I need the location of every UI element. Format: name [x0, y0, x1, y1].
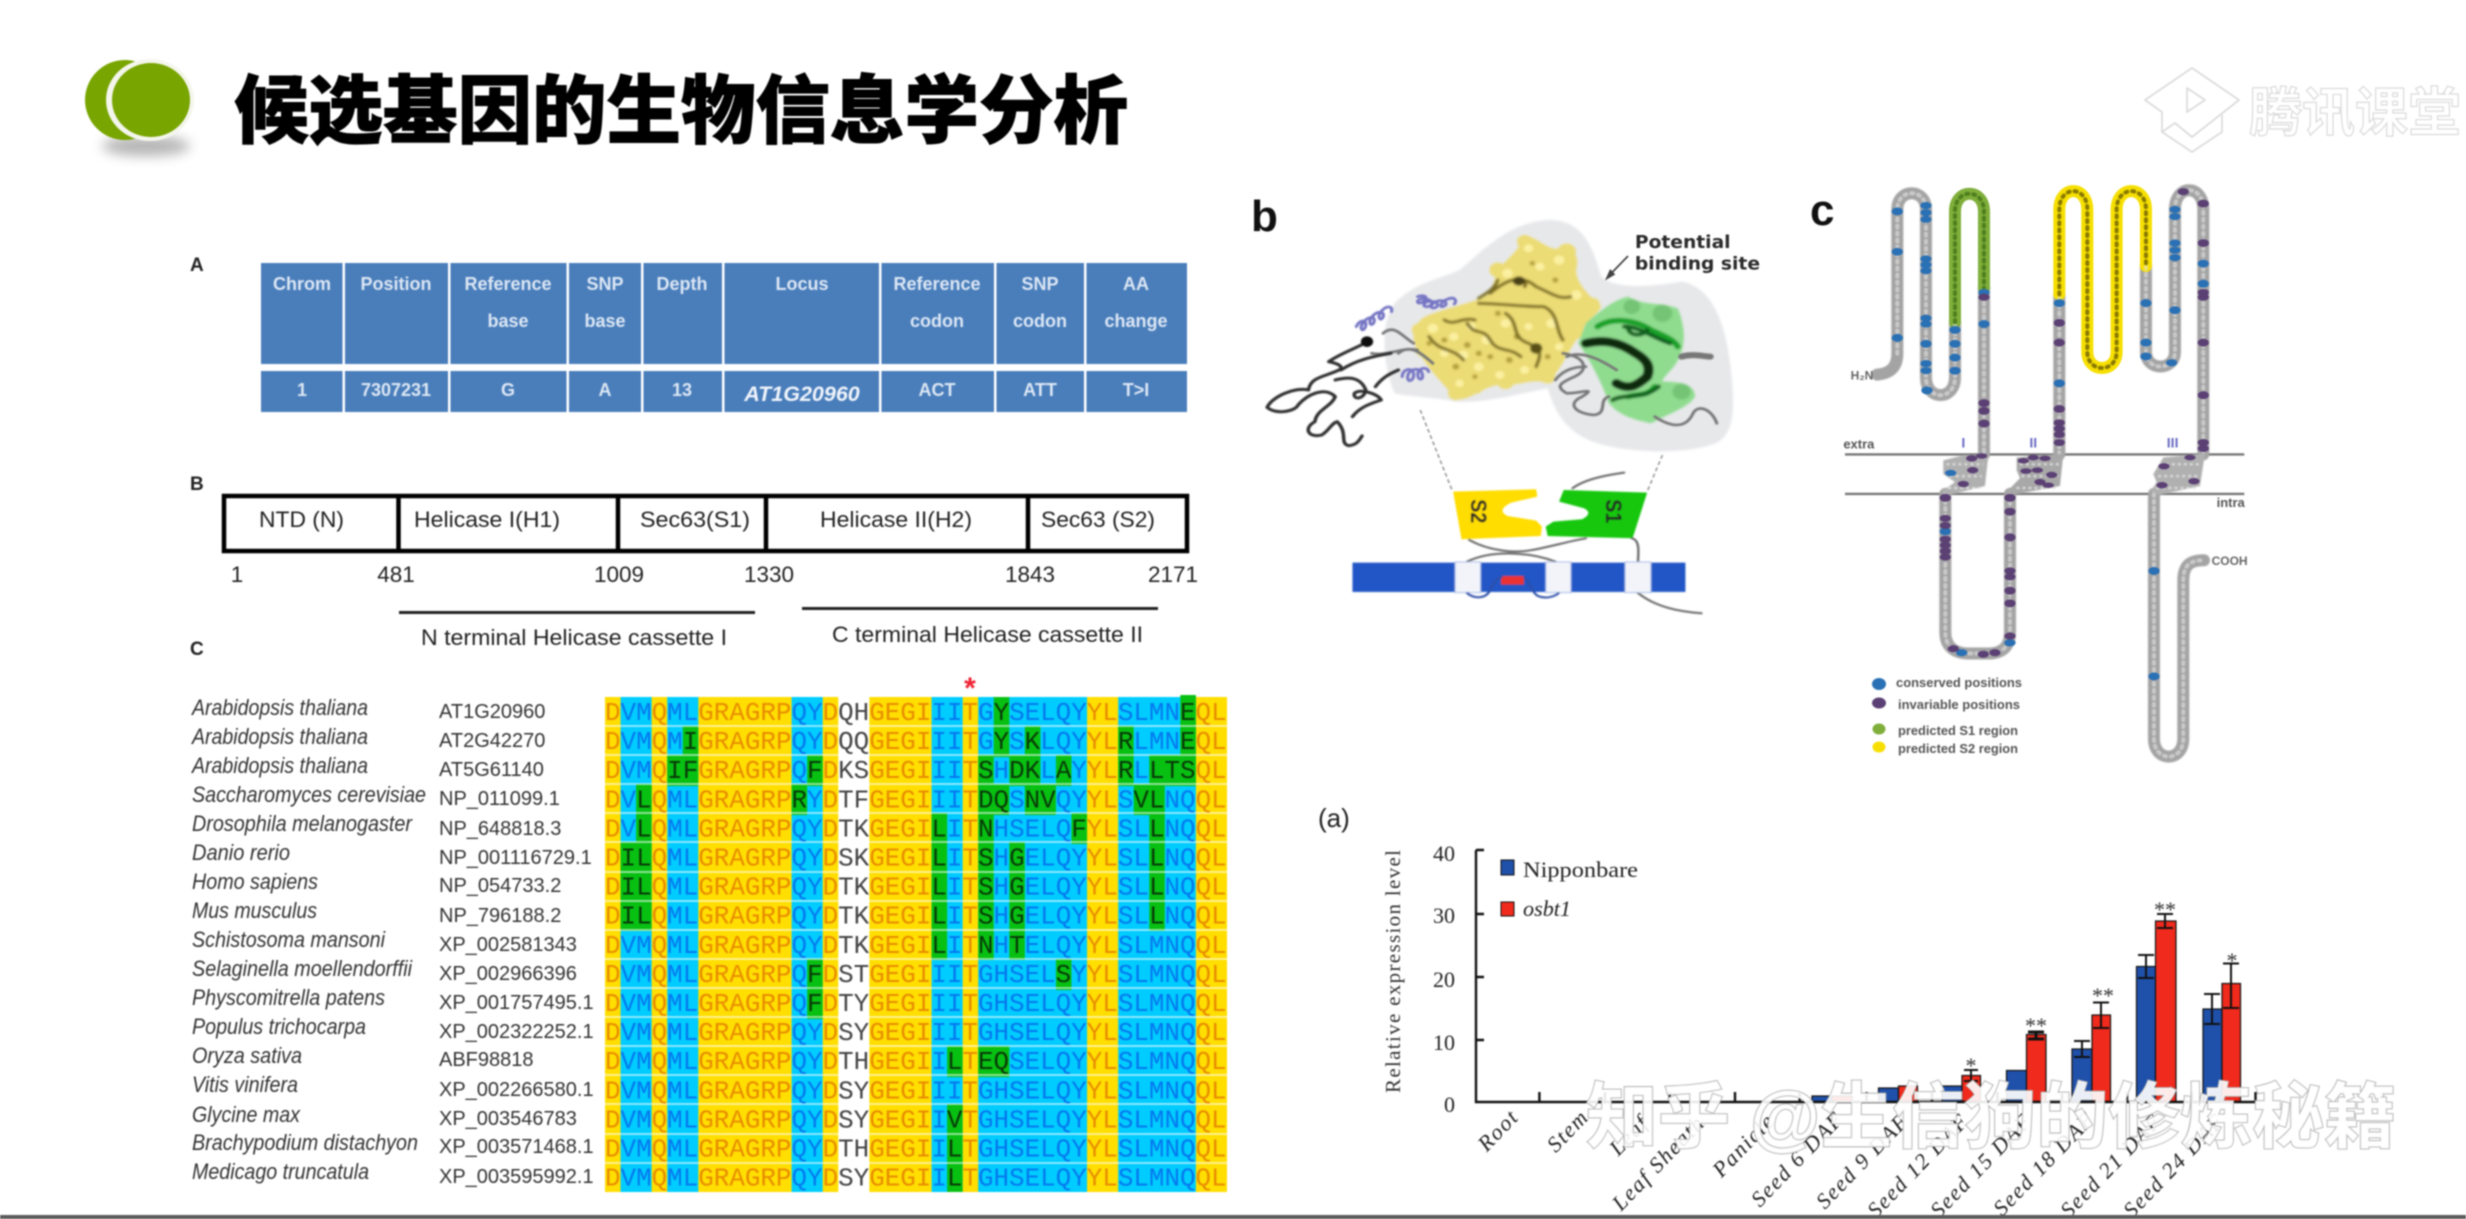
panel B: protein domain bar: Sec63(S1): [640, 507, 750, 532]
topology labels: [1843, 368, 2248, 568]
puzzle piece S1: [1546, 490, 1647, 538]
y-axis title: Relative expression level: [1381, 850, 1405, 1093]
topology labels: intra: [2217, 495, 2246, 510]
panel label B: B: [190, 474, 204, 495]
accession numbers: XP_003571468.1: [439, 1136, 594, 1158]
panel B: protein domain bar: 1843: [1005, 562, 1055, 587]
species names: Saccharomyces cerevisiae: [192, 782, 426, 807]
x-axis category labels: Root: [1472, 1104, 1524, 1157]
table header labels: AA: [1123, 274, 1149, 294]
table header labels: base: [584, 311, 626, 331]
accession numbers: XP_001757495.1: [439, 992, 594, 1014]
panel B: protein domain bar: 1330: [744, 562, 794, 587]
alignment letters: DVMQMIGRAGRPQYDQQGEGIIITGYSKLQYYLRLMNEQL: [605, 727, 1227, 757]
panel c: membrane topology diagram: [1843, 188, 2248, 757]
y-axis tick labels: 20: [1433, 967, 1455, 992]
invariable residue beads (purple): [1940, 188, 2209, 658]
table header labels: Chrom: [273, 274, 331, 294]
row separators: [605, 725, 1227, 1164]
error bars: [1964, 914, 2239, 1081]
x-axis category labels: Panicle: [1706, 1108, 1780, 1183]
species names: Drosophila melanogaster: [192, 811, 414, 836]
S1 region in green: [1955, 194, 1984, 322]
alignment letters: DVMQMLGRAGRPQYDSYGEGIIITGHSELQYYLSLMNQQL: [605, 1018, 1227, 1048]
panel B: protein domain bar: 1009: [594, 562, 644, 587]
chart legend: Nipponbare: [1523, 857, 1638, 882]
binding site label: Potential: [1635, 233, 1731, 253]
table data values: 1: [297, 380, 307, 400]
table data row: [261, 371, 1187, 412]
topology labels: extra: [1843, 436, 1875, 451]
species names: Selaginella moellendorffii: [192, 956, 413, 981]
species names: Vitis vinifera: [192, 1072, 298, 1097]
table data values: 13: [672, 380, 692, 400]
topology labels: III: [2167, 434, 2178, 450]
accession numbers: AT5G61140: [439, 759, 544, 781]
table header labels: change: [1104, 311, 1168, 331]
accession numbers: XP_002966396: [439, 963, 577, 985]
alignment letters: DVMQMLGRAGRPQFDTYGEGIIITGHSELQYYLSLMNQQL: [605, 989, 1227, 1019]
table data values: AT1G20960: [743, 382, 860, 406]
table data values: ACT: [918, 380, 956, 400]
panel label c: c: [1810, 186, 1834, 235]
y-axis tick labels: [1433, 841, 1455, 1117]
bottom rule: [0, 1215, 2466, 1219]
species names: [190, 695, 426, 1184]
significance stars: *: [2226, 948, 2238, 973]
puzzle piece S2: [1453, 489, 1542, 539]
alignment letters: DILQMLGRAGRPQYDTKGEGILITSHGELQYYLSLLNQQL: [605, 902, 1227, 932]
table data values: [297, 380, 1149, 406]
table header labels: codon: [910, 311, 964, 331]
bars osbt1: [1832, 921, 2240, 1102]
binding site label: binding site: [1635, 254, 1760, 274]
panel B: protein domain bar: 2171: [1148, 562, 1198, 587]
accession numbers: AT1G20960: [439, 701, 545, 723]
accession numbers: XP_003546783: [439, 1108, 577, 1130]
alignment letters: DILQMLGRAGRPQYDSKGEGILITSHGELQYYLSLLNQQL: [605, 844, 1227, 874]
chart legend: [1501, 857, 1638, 921]
panel c legend: predicted S1 region: [1898, 723, 2018, 738]
x-axis category labels: [1472, 1104, 2230, 1219]
conserved residue beads (blue): [1892, 202, 2209, 680]
x-axis category labels: Stem: [1541, 1104, 1594, 1157]
axes and ticks: [1476, 850, 2256, 1102]
chart legend: osbt1: [1523, 896, 1571, 921]
arrow to binding site: [1607, 256, 1628, 278]
asterisk marking SNP column: *: [964, 672, 976, 705]
alignment letters: DVMQMLGRAGRPQYDSYGEGIIITGHSELQYYLSLMNQQL: [605, 1076, 1227, 1106]
topology labels: II: [2029, 434, 2037, 450]
alignment letters: DVMQMLGRAGRPQFDSTGEGIIITGHSELSYYLSLMNQQL: [605, 960, 1227, 990]
species names: Medicago truncatula: [192, 1159, 369, 1184]
table header labels: codon: [1013, 311, 1067, 331]
table header labels: Depth: [656, 274, 708, 294]
bar chart: relative expression level: [1381, 841, 2256, 1219]
x-axis category labels: Leaf Sheath: [1606, 1110, 1710, 1216]
sequence alignment: [605, 695, 1227, 1194]
panel B: protein domain bar: Helicase II(H2): [820, 507, 972, 532]
panel c legend: conserved positions: [1896, 675, 2022, 690]
y-axis tick labels: 30: [1433, 903, 1455, 928]
watermark logo: graduation cap and 腾讯课堂: 腾讯课堂: [2249, 71, 2461, 147]
x-axis category labels: Leaf: [1603, 1109, 1654, 1161]
significance stars: **: [2025, 1013, 2047, 1038]
species names: Glycine max: [192, 1102, 301, 1127]
panel c legend: [1872, 675, 2022, 756]
panel label b: b: [1251, 192, 1278, 241]
y-axis tick labels: 0: [1444, 1092, 1455, 1117]
panel label C: C: [190, 639, 204, 660]
y-axis tick labels: 10: [1433, 1030, 1455, 1055]
table data values: T>I: [1123, 380, 1149, 400]
accession numbers: AT2G42270: [439, 730, 545, 752]
accession numbers: NP_796188.2: [439, 905, 561, 927]
accession numbers: XP_002266580.1: [439, 1079, 594, 1101]
significance stars: [1966, 897, 2238, 1078]
table data values: ATT: [1023, 380, 1057, 400]
cassette I bracket and label: [399, 611, 755, 650]
blue membrane bar: [1352, 562, 1685, 597]
panel B: protein domain bar: NTD (N): [259, 507, 344, 532]
table data values: A: [598, 380, 612, 400]
alignment letters: DVMQMLGRAGRPQYDSYGEGIILTGHSELQYYLSLMNQQL: [605, 1164, 1227, 1194]
alignment letters: DVMQMLGRAGRPQYDSYGEGIIVTGHSELQYYLSLMNQQL: [605, 1105, 1227, 1135]
species names: Oryza sativa: [192, 1043, 302, 1068]
puzzle piece S2: S2: [1466, 499, 1490, 523]
title icon: two green discs: [85, 59, 194, 156]
x-axis category labels: Seed 6 DAF: [1746, 1106, 1849, 1211]
species names: Homo sapiens: [192, 869, 318, 894]
accession numbers: NP_011099.1: [439, 788, 560, 810]
x-axis category labels: Seed 9 DAF: [1811, 1108, 1914, 1213]
table header labels: Locus: [775, 274, 829, 294]
species names: Physcomitrella patens: [192, 985, 385, 1010]
significance stars: **: [2092, 983, 2114, 1008]
topology labels: I: [1961, 434, 1965, 450]
alignment letters: DVMQMLGRAGRPQYDQHGEGIIITGYSELQYYLSLMNEQL: [605, 698, 1227, 728]
table header labels: SNP: [586, 274, 624, 294]
watermark logo: graduation cap and 腾讯课堂: [2145, 68, 2461, 152]
significance stars: **: [2154, 897, 2176, 922]
accession numbers: NP_648818.3: [439, 818, 561, 840]
S2 region in yellow: [2059, 191, 2146, 368]
cassette II bracket and label: [802, 607, 1158, 647]
table header row: [261, 263, 1187, 364]
species names: Arabidopsis thaliana: [190, 724, 368, 749]
table header labels: Reference: [893, 274, 981, 294]
panel b: protein structure and domain schematic: [1267, 220, 1760, 613]
table header labels: SNP: [1021, 274, 1059, 294]
accession numbers: NP_001116729.1: [439, 847, 592, 869]
topology labels: H₂N: [1851, 368, 1873, 382]
panel B: protein domain bar: Sec63 (S2): [1041, 507, 1155, 532]
yellow surface domain S2: [1412, 235, 1601, 400]
black N-terminal loops: [1267, 336, 1398, 446]
alignment column shading: [605, 697, 1227, 1192]
cassette I bracket and label: N terminal Helicase cassette I: [421, 625, 727, 650]
alignment letters: DVMQMLGRAGRPQYDTKGEGILITNHTELQYYLSLMNQQL: [605, 931, 1227, 961]
transmembrane helices: [1942, 454, 2205, 495]
gray loop strands: [1372, 330, 1717, 425]
S1 and S2 residue dots: [1955, 191, 2146, 368]
panel B: protein domain bar: 481: [377, 562, 415, 587]
blue helical coils: [1356, 296, 1456, 381]
title: 候选基因的生物信息学分析: [234, 70, 1128, 153]
accession numbers: XP_002581343: [439, 934, 577, 956]
accession numbers: ABF98818: [439, 1049, 534, 1071]
x-axis category labels: Seed 18 DAF: [1988, 1106, 2100, 1219]
species names: Mus musculus: [192, 898, 317, 923]
species names: Schistosoma mansoni: [192, 927, 386, 952]
table data values: G: [501, 380, 515, 400]
alignment letters: DVMQMLGRAGRPQYDTHGEGIILTEQSELQYYLSLMNQQL: [605, 1047, 1227, 1077]
residue bead texture: [1897, 190, 2204, 757]
gray envelope of the structure: [1384, 220, 1733, 451]
divergent residues in green: [621, 695, 1196, 1192]
alignment letters: DVLQMLGRAGRPRYDTFGEGIIITDQSNVQYYLSVLNQQL: [605, 785, 1227, 815]
panel label A: A: [190, 255, 204, 276]
panel B: protein domain bar: [224, 496, 1198, 587]
table header labels: Reference: [464, 274, 552, 294]
significance stars: *: [1966, 1053, 1976, 1078]
alignment letters: DVMQMLGRAGRPQYDTHGEGIILTGHSELQYYLSLMNQQL: [605, 1134, 1227, 1164]
panel c legend: invariable positions: [1898, 697, 2020, 712]
dashed projection lines: [1420, 410, 1662, 492]
alignment letters: [605, 698, 1227, 1194]
y-axis tick labels: 40: [1433, 841, 1455, 866]
bars Nipponbare: [1812, 966, 2222, 1102]
topology labels: COOH: [2212, 554, 2248, 568]
alignment letters: DILQMLGRAGRPQYDTKGEGILITSHGELQYYLSLLNQQL: [605, 873, 1227, 903]
watermark text: 知乎 @生信狗的修炼秘籍: [1586, 1078, 2396, 1158]
puzzle piece S1: S1: [1600, 499, 1625, 523]
table data values: 7307231: [361, 380, 431, 400]
table header labels: base: [487, 311, 529, 331]
cassette II bracket and label: C terminal Helicase cassette II: [832, 622, 1143, 647]
species names: Populus trichocarpa: [192, 1014, 366, 1039]
table header labels: [273, 274, 1168, 331]
binding site label: [1635, 233, 1760, 274]
membrane lines: [1845, 454, 2244, 494]
panel B: protein domain bar: 1: [231, 562, 243, 587]
accession numbers: XP_002322252.1: [439, 1021, 594, 1043]
green surface domain S1: [1578, 297, 1695, 423]
gray residue chain: [1877, 190, 2204, 757]
panel B: protein domain bar: Helicase I(H1): [414, 507, 560, 532]
alignment letters: DVMQIFGRAGRPQFDKSGEGIIITSHDKLAYYLRLLTSQL: [605, 756, 1227, 786]
accession numbers: XP_003595992.1: [439, 1166, 594, 1188]
accession numbers: NP_054733.2: [439, 875, 561, 897]
species names: Danio rerio: [192, 840, 290, 865]
species names: Arabidopsis thaliana: [190, 695, 368, 720]
species names: Arabidopsis thaliana: [190, 753, 368, 778]
table header labels: Position: [360, 274, 432, 294]
panel c legend: predicted S2 region: [1898, 741, 2018, 756]
species names: Brachypodium distachyon: [192, 1130, 418, 1155]
panel A: SNP table: [261, 263, 1187, 412]
connecting strands: [1467, 473, 1701, 613]
accession numbers: [439, 701, 594, 1188]
alignment letters: DVLQMLGRAGRPQYDTKGEGILITNHSELQFYLSLLNQQL: [605, 814, 1227, 844]
chart panel label (a): (a): [1318, 803, 1350, 833]
